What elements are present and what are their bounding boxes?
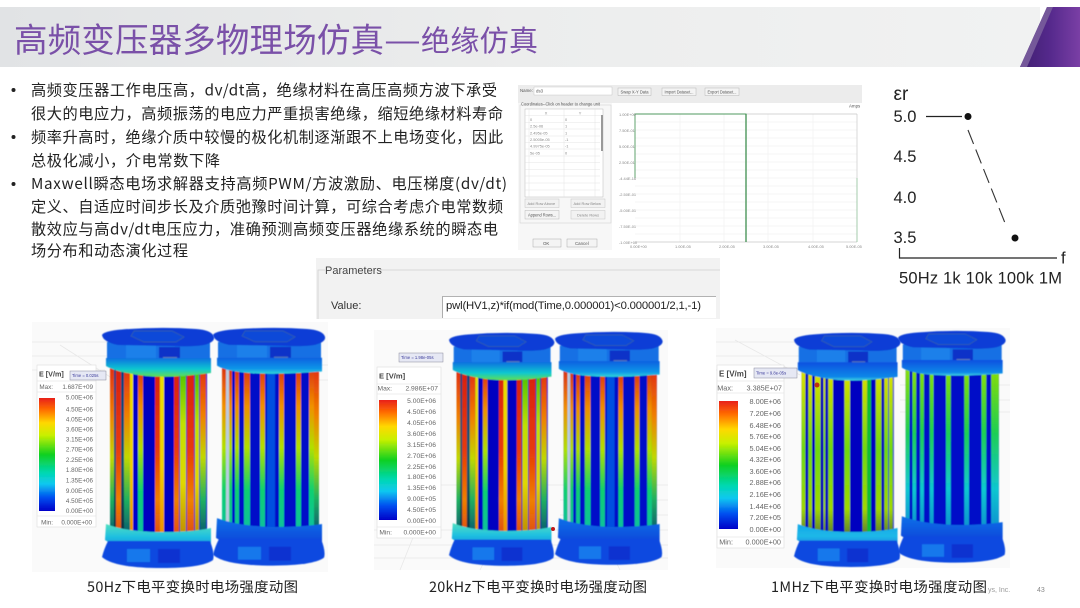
- time tag: Time = 1.98e-05s: [401, 355, 434, 360]
- text block: bullet list: [12, 78, 507, 261]
- legend: E field colour scale: E [V/m]: [39, 370, 64, 378]
- panel: 1MHz field simulation: [716, 328, 1010, 568]
- panel: 50Hz field simulation: [32, 322, 328, 572]
- legend: E field colour scale: 2.986E+07: [405, 386, 438, 392]
- caption: 1MHz: 1MHz下电平变换时电场强度动图: [771, 576, 987, 597]
- legend: E field colour scale: 9.00E+05: [66, 488, 93, 495]
- legend: E field colour scale: 4.50E+05: [66, 498, 93, 505]
- caption: 20kHz: 20kHz下电平变换时电场强度动图: [429, 576, 647, 597]
- legend: E field colour scale: 5.00E+06: [66, 394, 93, 402]
- panel: dataset dialog screenshot: Import Dataset...: [664, 90, 694, 94]
- legend: E field colour scale: 3.60E+06: [66, 426, 93, 434]
- chart: relative permittivity vs frequency: 4.5: [894, 148, 916, 166]
- panel: parameters dialog: Parameters: [325, 265, 382, 277]
- coil: left transformer: [449, 333, 554, 566]
- chart: relative permittivity vs frequency: 5.0: [894, 108, 916, 126]
- legend: E field colour scale: 0.00E+00: [66, 508, 93, 515]
- time tag: [399, 353, 443, 362]
- legend: E field colour scale: 1.80E+06: [407, 474, 436, 481]
- table: 4.9975e-05: [530, 144, 550, 148]
- line chart: square wave plot: 4.00E-05: [808, 244, 824, 249]
- title: —: [384, 14, 421, 62]
- table: [525, 109, 603, 197]
- table: 1: [565, 130, 567, 136]
- panel: parameters dialog: Value:: [331, 300, 361, 312]
- legend: E field colour scale: E [V/m]: [719, 370, 747, 378]
- legend: E field colour scale: Max:: [378, 386, 392, 392]
- legend: E field colour scale: Min:: [41, 520, 53, 526]
- legend: E field colour scale: 4.32E+06: [750, 455, 781, 464]
- legend: E field colour scale: 6.48E+06: [750, 421, 781, 430]
- text block: bullet list: 很大的电应力，高频振荡的电应力严重损害绝缘，缩短绝缘材料寿命: [31, 102, 503, 124]
- legend: E field colour scale: Max:: [39, 384, 53, 391]
- table: -1: [565, 137, 568, 142]
- legend: E field colour scale: [717, 365, 784, 548]
- legend: E field colour scale: 3.15E+06: [66, 436, 93, 444]
- panel: parameters dialog: pwl(HV1,z)*if(mod(Time,0.000001)<0.000001/2,1,-1): [446, 300, 701, 312]
- line chart: square wave plot: [612, 103, 862, 250]
- text block: bullet list: 散效应与高dv/dt电压应力，准确预测高频变压器绝缘系统的瞬态电: [31, 218, 498, 240]
- legend: E field colour scale: 1.35E+06: [407, 485, 436, 492]
- legend: E field colour scale: 7.20E+06: [750, 409, 781, 418]
- footer text: [988, 587, 1045, 594]
- table: 0: [565, 117, 568, 122]
- legend: E field colour scale: 9.00E+05: [407, 496, 436, 503]
- legend: E field colour scale: 4.05E+06: [407, 420, 436, 427]
- legend: E field colour scale: 1.44E+06: [750, 502, 781, 511]
- text block: bullet list: 场分布和动态演化过程: [31, 239, 188, 261]
- line chart: square wave plot: 1.00E-05: [675, 244, 691, 249]
- chart: relative permittivity vs frequency: 4.0: [894, 189, 916, 207]
- panel: dataset dialog screenshot: Append Rows...: [528, 212, 556, 218]
- line chart: square wave plot: 0.00E+00: [630, 244, 648, 249]
- footer text: ys, Inc.: [988, 587, 1010, 594]
- text block: bullet list: 总极化减小，介电常数下降: [31, 149, 220, 171]
- legend: E field colour scale: E [V/m]: [379, 372, 406, 380]
- legend: E field colour scale: 0.000E+00: [403, 530, 436, 536]
- line chart: square wave plot: 7.50E-01: [619, 128, 635, 133]
- coil: right transformer: [213, 328, 325, 566]
- line chart: square wave plot: 1.00E+00: [619, 112, 637, 117]
- legend: E field colour scale: 2.25E+06: [66, 457, 93, 464]
- line chart: square wave plot: 2.50E-01: [619, 160, 635, 165]
- icon: purple corner parallelogram: [1020, 7, 1080, 67]
- marker: [551, 527, 555, 531]
- panel: dataset dialog screenshot: Coordinates--Click on header to change unit: [521, 102, 601, 106]
- panel: dataset dialog screenshot: Swap X-Y Data: [620, 90, 649, 94]
- panel: parameters dialog: [316, 258, 720, 319]
- legend: E field colour scale: 3.385E+07: [746, 384, 782, 392]
- table: 1: [565, 124, 567, 128]
- coil: right transformer: [898, 331, 1006, 563]
- text block: bullet list: Maxwell瞬态电场求解器支持高频PWM/方波激励、电压梯度(dv/dt): [31, 172, 507, 194]
- caption: 50Hz: 50Hz下电平变换时电场强度动图: [87, 576, 298, 597]
- legend: E field colour scale: 1.35E+06: [66, 478, 93, 484]
- legend: E field colour scale: 3.60E+06: [750, 467, 781, 476]
- legend: E field colour scale: 1.80E+06: [66, 467, 93, 474]
- text block: bullet list: 定义、自适应时间步长及介质弛豫时间计算，可综合考虑介电常数频: [31, 195, 503, 217]
- table: -1: [565, 144, 568, 148]
- legend: E field colour scale: [37, 365, 96, 527]
- legend: E field colour scale: Min:: [379, 530, 392, 536]
- legend: E field colour scale: 5.00E+06: [407, 398, 436, 405]
- title: 高频变压器多物理场仿真: [14, 13, 384, 62]
- panel: dataset dialog screenshot: Export Dataset...: [708, 90, 736, 94]
- line chart: square wave plot: 5.00E-05: [846, 244, 862, 249]
- line chart: square wave plot: Amps: [849, 104, 861, 108]
- panel: dataset dialog screenshot: Name:: [520, 88, 533, 93]
- legend: E field colour scale: 0.00E+00: [750, 525, 781, 534]
- panel: dataset dialog screenshot: Delete Rows: [577, 212, 599, 218]
- table: 2.5005e-05: [530, 137, 550, 142]
- table: 0: [530, 117, 533, 122]
- legend: E field colour scale: 3.60E+06: [407, 431, 436, 438]
- legend: E field colour scale: 4.05E+06: [66, 416, 93, 424]
- legend: E field colour scale: 0.00E+00: [407, 518, 436, 525]
- panel: dataset dialog screenshot: ds3: [536, 88, 544, 94]
- time tag: Time = 0.025s: [72, 373, 98, 378]
- legend: E field colour scale: 2.25E+06: [407, 464, 436, 471]
- panel: dataset dialog screenshot: Cancel: [575, 241, 589, 246]
- legend: E field colour scale: Max:: [717, 384, 733, 392]
- panel: dataset dialog screenshot: OK: [543, 241, 549, 246]
- legend: E field colour scale: 0.000E+00: [745, 538, 781, 546]
- time tag: [754, 368, 797, 378]
- header band: [0, 7, 1080, 67]
- panel: dataset dialog screenshot: Add Row Below: [574, 201, 601, 206]
- chart: relative permittivity vs frequency: 50Hz 1k 10k 100k 1M: [899, 270, 1062, 288]
- legend: E field colour scale: 4.50E+06: [407, 409, 436, 416]
- legend: E field colour scale: 0.000E+00: [61, 520, 92, 526]
- table: 2.495e-05: [530, 130, 548, 136]
- title: 绝缘仿真: [421, 18, 538, 60]
- line chart: square wave plot: -7.50E-01: [619, 224, 636, 229]
- line chart: square wave plot: -5.00E-01: [619, 208, 636, 213]
- time tag: [70, 371, 106, 380]
- coil: left transformer: [102, 328, 214, 568]
- legend: E field colour scale: 3.15E+06: [407, 442, 436, 449]
- legend: E field colour scale: 2.88E+06: [750, 478, 781, 487]
- text block: bullet list: 高频变压器工作电压高，dv/dt高，绝缘材料在高压高频方波下承受: [31, 78, 497, 100]
- coil: right transformer: [555, 332, 663, 565]
- panel: dataset dialog screenshot: Add Row Above: [528, 201, 555, 206]
- text block: bullet list: 频率升高时，绝缘介质中较慢的极化机制逐渐跟不上电场变化，因此: [31, 126, 503, 148]
- line chart: square wave plot: 3.00E-05: [763, 244, 779, 249]
- footer text: 43: [1037, 587, 1045, 594]
- table: 0: [565, 150, 568, 156]
- marker: [814, 382, 820, 388]
- line chart: square wave plot: 5.00E-01: [619, 144, 635, 149]
- line chart: square wave plot: -2.50E-01: [619, 192, 636, 197]
- panel: 20kHz field simulation: [374, 330, 668, 570]
- legend: E field colour scale: 2.16E+06: [750, 490, 781, 499]
- chart: relative permittivity vs frequency: 3.5: [894, 229, 916, 247]
- legend: E field colour scale: Min:: [719, 538, 733, 546]
- line chart: square wave plot: -4.44E-16: [619, 176, 636, 181]
- legend: E field colour scale: 5.76E+06: [750, 432, 781, 441]
- legend: E field colour scale: 4.50E+06: [66, 406, 93, 414]
- table: 2.5e-06: [530, 124, 543, 128]
- table: X: [545, 110, 548, 116]
- panel: dataset dialog screenshot: [518, 85, 862, 250]
- chart: relative permittivity vs frequency: [894, 84, 1066, 288]
- legend: E field colour scale: 8.00E+06: [750, 397, 781, 406]
- chart: relative permittivity vs frequency: εr: [894, 84, 909, 105]
- chart: relative permittivity vs frequency: f: [1061, 250, 1066, 268]
- legend: E field colour scale: 2.70E+06: [66, 446, 93, 454]
- line chart: square wave plot: -1.00E+00: [619, 240, 638, 245]
- line chart: square wave plot: 2.00E-05: [719, 244, 735, 249]
- legend: E field colour scale: 2.70E+06: [407, 453, 436, 460]
- legend: E field colour scale: [377, 367, 441, 538]
- time tag: Time = 9.8e-05s: [756, 370, 786, 376]
- legend: E field colour scale: 4.50E+05: [407, 507, 436, 514]
- coil: left transformer: [794, 333, 900, 567]
- legend: E field colour scale: 5.04E+06: [750, 444, 781, 453]
- table: Y: [579, 110, 582, 116]
- table: 5e-05: [530, 150, 540, 156]
- legend: E field colour scale: 1.687E+09: [62, 384, 93, 391]
- legend: E field colour scale: 7.20E+05: [750, 513, 781, 522]
